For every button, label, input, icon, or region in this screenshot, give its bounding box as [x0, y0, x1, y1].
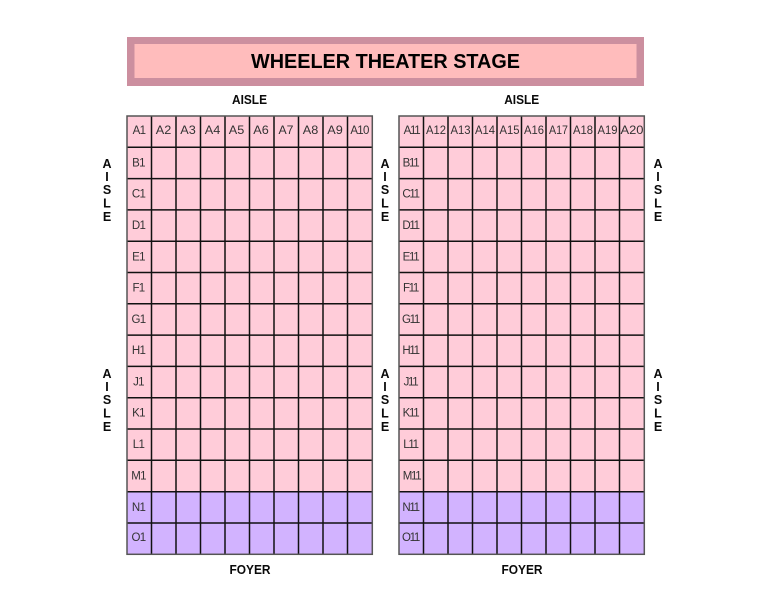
seat labels: row A right: A11: [404, 125, 420, 137]
seat labels: first column right: L11: [403, 439, 419, 451]
label: side aisle, centre lower: S: [381, 393, 389, 407]
seat labels: first column left: M1: [131, 470, 146, 482]
seat labels: first column right: D11: [402, 220, 420, 232]
seat labels: first column left: B1: [132, 158, 145, 170]
label: side aisle, centre lower: L: [381, 406, 389, 420]
seat labels: row A left: A7: [278, 123, 294, 137]
seat labels: row A left: A8: [303, 123, 319, 137]
seat labels: first column right: H11: [402, 345, 420, 357]
label: side aisle, centre upper: S: [381, 183, 389, 197]
label: top aisle left: AISLE: [232, 93, 267, 107]
seat labels: first column right: [402, 158, 421, 544]
label: side aisle, far right upper: S: [654, 183, 662, 197]
label: side aisle, centre upper: L: [381, 196, 389, 210]
label: side aisle, far right lower: L: [654, 406, 662, 420]
label: side aisle, far left lower: [102, 367, 112, 434]
seat labels: first column right: C11: [402, 189, 420, 201]
label: side aisle, far left upper: E: [103, 210, 111, 224]
seating block: right section: [399, 116, 644, 554]
label: side aisle, far left upper: L: [103, 196, 111, 210]
label: side aisle, far right lower: S: [654, 393, 662, 407]
label: side aisle, far left lower: A: [102, 367, 112, 381]
seat labels: first column left: F1: [132, 282, 145, 294]
seat labels: first column left: N1: [132, 502, 145, 514]
seat labels: row A left: A5: [229, 123, 245, 137]
seat labels: first column right: F11: [403, 282, 419, 294]
label: side aisle, far left upper: A: [102, 157, 112, 171]
seat labels: row A left: A4: [205, 123, 221, 137]
seat labels: row A left: [133, 123, 369, 137]
label: side aisle, centre lower: E: [381, 420, 389, 434]
seat labels: row A right: A12: [426, 123, 446, 137]
seat labels: first column left: D1: [132, 220, 145, 232]
seat labels: first column left: J1: [133, 376, 144, 388]
seat labels: first column right: E11: [403, 251, 419, 263]
label: top aisle right: AISLE: [504, 93, 539, 107]
seat labels: row A right: A18: [573, 123, 593, 137]
label: side aisle, far right lower: E: [654, 420, 662, 434]
label: foyer left: FOYER: [230, 563, 270, 577]
seat labels: row A left: A3: [180, 123, 196, 137]
seat labels: first column left: G1: [132, 314, 146, 326]
seat labels: row A right: A19: [598, 123, 618, 137]
seat labels: first column left: E1: [132, 251, 145, 263]
label: side aisle, centre lower: I: [383, 380, 387, 394]
label: side aisle, far right upper: I: [656, 170, 660, 184]
seat labels: row A left: A1: [133, 125, 146, 137]
label: side aisle, far left upper: [102, 157, 112, 224]
seating block: left section: [127, 116, 372, 554]
label: side aisle, far right lower: [653, 367, 663, 434]
label: side aisle, far left upper: I: [105, 170, 109, 184]
seat labels: first column right: N11: [402, 502, 420, 514]
label: side aisle, far right lower: I: [656, 380, 660, 394]
seat labels: row A right: A20: [620, 123, 644, 137]
seat labels: first column left: H1: [132, 345, 145, 357]
label: side aisle, far right upper: A: [653, 157, 663, 171]
label: side aisle, far left lower: S: [103, 393, 111, 407]
label: side aisle, far right upper: E: [654, 210, 662, 224]
seat labels: row A left: A9: [327, 123, 343, 137]
seat labels: first column left: O1: [132, 532, 146, 544]
label: side aisle, centre upper: [380, 157, 390, 224]
seat labels: row A right: A13: [450, 123, 471, 137]
seat labels: row A left: A6: [253, 123, 269, 137]
label: side aisle, centre upper: A: [380, 157, 390, 171]
seat labels: first column right: K11: [403, 408, 419, 420]
seat labels: first column left: C1: [132, 189, 145, 201]
label: side aisle, far left lower: I: [105, 380, 109, 394]
seat labels: first column left: [131, 158, 146, 544]
title banner: [127, 37, 644, 86]
seat labels: first column right: G11: [402, 314, 420, 326]
label: side aisle, far right upper: L: [654, 196, 662, 210]
label: side aisle, far left lower: L: [103, 406, 111, 420]
seat labels: row A right: A17: [549, 123, 568, 137]
label: side aisle, centre lower: A: [380, 367, 390, 381]
label: side aisle, centre upper: E: [381, 210, 389, 224]
seat labels: first column left: K1: [132, 408, 145, 420]
seat labels: first column right: O11: [402, 532, 420, 544]
seat labels: row A right: A14: [475, 123, 495, 137]
label: side aisle, far left lower: E: [103, 420, 111, 434]
seat labels: first column left: L1: [133, 439, 144, 451]
seat labels: row A right: A16: [524, 123, 544, 137]
label: side aisle, far right lower: A: [653, 367, 663, 381]
label: side aisle, centre lower: [380, 367, 390, 434]
label: foyer right: FOYER: [502, 563, 542, 577]
seat labels: first column right: M11: [403, 470, 421, 482]
seat labels: row A left: A10: [350, 125, 369, 137]
label: side aisle, far left upper: S: [103, 183, 111, 197]
label: side aisle, centre upper: I: [383, 170, 387, 184]
seat labels: row A right: [404, 123, 644, 137]
seat labels: first column right: B11: [403, 158, 419, 170]
title: WHEELER THEATER STAGE: [251, 50, 520, 73]
seat labels: row A right: A15: [500, 123, 520, 137]
seat labels: first column right: J11: [404, 376, 418, 388]
label: side aisle, far right upper: [653, 157, 663, 224]
seat labels: row A left: A2: [156, 123, 172, 137]
